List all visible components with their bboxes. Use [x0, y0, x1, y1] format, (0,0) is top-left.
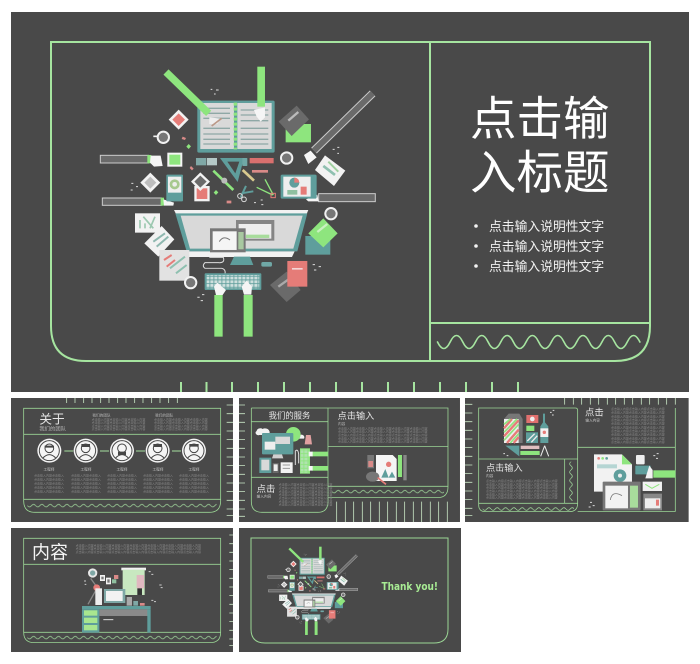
left text: 点击输入内容点击输入内容点击输入内容点击输入内容: [486, 478, 558, 483]
slide: thank you: [239, 528, 461, 652]
illustration: desk scene: [82, 568, 163, 633]
team text: 我们的团队: [155, 412, 174, 417]
illustration: small workspace: [268, 547, 358, 635]
arm: top left: [166, 72, 222, 126]
intro text: 点击输入内容点击输入内容点击输入内容点击输入内容点击输入内容点击输入内容点击输入内容: [76, 542, 201, 547]
team members text: 点击输入内容点击输入: [143, 489, 173, 494]
ticks: [67, 398, 233, 516]
small text: 点击输入内容点击输入内容点击输入内容: [279, 502, 332, 507]
team members text: 工程师: [117, 466, 128, 471]
small heading: 输入内容: [257, 493, 272, 498]
team members text: 点击输入内容点击输入: [34, 480, 64, 485]
right text: 点击输入内容点击输入内容点击输入内容: [611, 421, 665, 426]
wave: [27, 502, 217, 509]
bullet list: 点击输入说明性文字: [489, 239, 604, 254]
arms: typing: [214, 281, 253, 337]
team text: 点击输入内容点击输入内容点击输入内容: [154, 426, 208, 431]
frame: [251, 408, 448, 512]
heading: 关于: [39, 412, 65, 426]
team members text: 工程师: [153, 466, 164, 471]
team members text: 工程师: [188, 466, 200, 471]
title: 点击输: [470, 93, 610, 145]
small text: 点击输入内容点击输入内容点击输入内容: [279, 488, 332, 493]
left text: 点击输入内容点击输入内容点击输入内容点击输入内容: [486, 488, 558, 493]
arm: left lower: [102, 198, 174, 206]
long lines: [337, 502, 447, 522]
team members text: 点击输入内容点击输入: [179, 476, 209, 481]
small text: 点击输入内容点击输入内容点击输入内容: [279, 492, 332, 497]
heading: 我们的服务: [269, 410, 310, 420]
vertical wave: [568, 462, 574, 501]
team members text: 点击输入内容点击输入: [107, 472, 137, 477]
illustration: design documents: [366, 455, 407, 484]
team members text: 点击输入内容点击输入: [143, 472, 173, 477]
team members text: 工程师: [44, 466, 55, 471]
team members text: 点击输入内容点击输入: [34, 484, 64, 489]
ticks: [229, 535, 233, 646]
small heading: [257, 483, 275, 498]
small heading: 点击: [257, 483, 275, 494]
arm: left upper: [100, 155, 163, 167]
slide: contents: [11, 528, 233, 652]
team members text: 点击输入内容点击输入: [34, 476, 64, 481]
team members text: 点击输入内容点击输入: [179, 480, 209, 485]
team members text: 点击输入内容点击输入: [107, 484, 137, 489]
team members text: 点击输入内容点击输入: [179, 489, 209, 494]
main frame: [51, 42, 650, 361]
team members text: [34, 466, 209, 494]
wave decoration: [438, 336, 640, 348]
desk items: [131, 89, 345, 301]
heading: lower left: 点击输入: [486, 462, 523, 473]
keyboard and mouse: [203, 257, 272, 290]
body text: [338, 425, 428, 444]
team members text: 点击输入内容点击输入: [179, 472, 209, 477]
small heading: [585, 407, 604, 423]
team text: 我们的团队: [92, 412, 111, 417]
team text: [92, 412, 208, 431]
heading: lower left: [486, 462, 523, 478]
arm: top right: [304, 93, 373, 164]
team members text: 点击输入内容点击输入: [107, 489, 137, 494]
team members text: 点击输入内容点击输入: [34, 472, 64, 477]
team members text: 点击输入内容点击输入: [71, 484, 101, 489]
thank you text: Thank you!: [382, 581, 438, 593]
arm: right: [306, 194, 375, 202]
left text: 点击输入内容点击输入内容点击输入内容点击输入内容: [486, 491, 558, 496]
team members text: 点击输入内容点击输入: [34, 489, 64, 494]
notebook: [197, 101, 275, 153]
right text: 点击输入内容点击输入内容点击输入内容: [611, 439, 665, 444]
wave: [332, 488, 444, 495]
team members text: 点击输入内容点击输入: [107, 476, 137, 481]
small text: 点击输入内容点击输入内容点击输入内容: [279, 495, 332, 500]
right text: 点击输入内容点击输入内容点击输入内容: [611, 428, 665, 433]
ticks: [239, 405, 245, 516]
heading: 我们的团队: [39, 425, 67, 433]
avatars: [37, 439, 206, 463]
bullet list: 点击输入说明性文字: [489, 219, 604, 234]
cup and books: right of monitor: [305, 207, 338, 255]
body text: 点击输入内容点击输入内容点击输入内容点击输入内容点击输入内容: [338, 429, 428, 434]
team members text: 点击输入内容点击输入: [179, 484, 209, 489]
bullet list: [474, 219, 604, 274]
illustration: documents and devices: [589, 454, 675, 510]
illustration: computer and devices: [256, 427, 328, 474]
left text: 点击输入内容点击输入内容点击输入内容点击输入内容: [486, 495, 558, 500]
body text: 点击输入内容点击输入内容点击输入内容点击输入内容点击输入内容: [338, 425, 428, 430]
team text: 点击输入内容点击输入内容点击输入内容: [154, 423, 208, 428]
left text: [486, 478, 558, 500]
small text: 点击输入内容点击输入内容点击输入内容: [279, 482, 332, 487]
slide: input content: [465, 398, 689, 522]
team members text: 工程师: [81, 466, 92, 471]
team members text: 点击输入内容点击输入: [71, 476, 101, 481]
illustration: flat-lay workspace: [100, 67, 375, 337]
small text: [279, 482, 332, 507]
heading: 内容: [32, 542, 68, 562]
team text: 点击输入内容点击输入内容点击输入内容: [92, 423, 145, 428]
team members text: 点击输入内容点击输入: [71, 489, 101, 494]
body text: 点击输入内容点击输入内容点击输入内容点击输入内容点击输入内容: [338, 439, 428, 444]
team members text: 点击输入内容点击输入: [143, 480, 173, 485]
left text: 点击输入内容点击输入内容点击输入内容点击输入内容: [486, 481, 558, 486]
ticks: [465, 398, 675, 516]
team text: 点击输入内容点击输入内容点击输入内容: [92, 416, 145, 421]
team members text: 点击输入内容点击输入: [71, 480, 101, 485]
team text: 点击输入内容点击输入内容点击输入内容: [154, 416, 208, 421]
small text: 点击输入内容点击输入内容点击输入内容: [279, 485, 332, 490]
frame: [251, 538, 448, 643]
frame: [479, 408, 675, 512]
documents: left of monitor: [135, 213, 197, 289]
right text: 点击输入内容点击输入内容点击输入内容: [611, 410, 665, 415]
right text: 点击输入内容点击输入内容点击输入内容: [611, 413, 665, 418]
title: [470, 93, 610, 199]
bullet list: 点击输入说明性文字: [489, 259, 604, 274]
right text: 点击输入内容点击输入内容点击输入内容: [611, 424, 665, 429]
body text: 点击输入内容点击输入内容点击输入内容点击输入内容点击输入内容: [338, 432, 428, 437]
right text: [611, 406, 665, 444]
input heading: 内容: [338, 421, 346, 426]
team members text: 点击输入内容点击输入: [143, 484, 173, 489]
input heading: [338, 410, 374, 426]
wave: [27, 634, 217, 641]
team members text: 点击输入内容点击输入: [107, 480, 137, 485]
small heading: 输入内容: [585, 418, 600, 423]
team text: 点击输入内容点击输入内容点击输入内容: [92, 420, 145, 425]
intro text: [76, 542, 201, 554]
heading: [39, 412, 67, 433]
frame: [24, 538, 221, 643]
right text: 点击输入内容点击输入内容点击输入内容: [611, 432, 665, 437]
heading: lower left: 内容: [486, 473, 494, 478]
books: top right: [279, 106, 311, 142]
intro text: 点击输入内容点击输入内容点击输入内容点击输入内容点击输入内容点击输入内容点击输入内容: [76, 546, 201, 551]
title: 入标题: [470, 147, 610, 199]
wave: [483, 506, 574, 512]
team text: 点击输入内容点击输入内容点击输入内容: [154, 420, 208, 425]
team text: 点击输入内容点击输入内容点击输入内容: [92, 426, 145, 431]
slide: about team: [11, 398, 233, 522]
frame: [24, 408, 221, 512]
monitor: [174, 210, 308, 265]
main slide: [11, 12, 689, 392]
illustration: packages and tools: [503, 410, 554, 456]
right text: 点击输入内容点击输入内容点击输入内容: [611, 417, 665, 422]
arm: top: [254, 67, 265, 122]
small heading: 点击: [585, 407, 604, 418]
team members text: 点击输入内容点击输入: [71, 472, 101, 477]
body text: 点击输入内容点击输入内容点击输入内容点击输入内容点击输入内容: [338, 435, 428, 440]
input heading: 点击输入: [338, 410, 374, 421]
books: bottom right: [270, 261, 307, 302]
right text: 点击输入内容点击输入内容点击输入内容: [611, 406, 665, 411]
intro text: 点击输入内容点击输入内容点击输入内容点击输入内容点击输入内容点击输入内容点击输入内容: [76, 549, 201, 554]
right text: 点击输入内容点击输入内容点击输入内容: [611, 435, 665, 440]
small text: 点击输入内容点击输入内容点击输入内容: [279, 498, 332, 503]
slide: our services: [239, 398, 460, 522]
left text: 点击输入内容点击输入内容点击输入内容点击输入内容: [486, 485, 558, 490]
bottom ticks: [181, 382, 518, 392]
team members text: 点击输入内容点击输入: [143, 476, 173, 481]
